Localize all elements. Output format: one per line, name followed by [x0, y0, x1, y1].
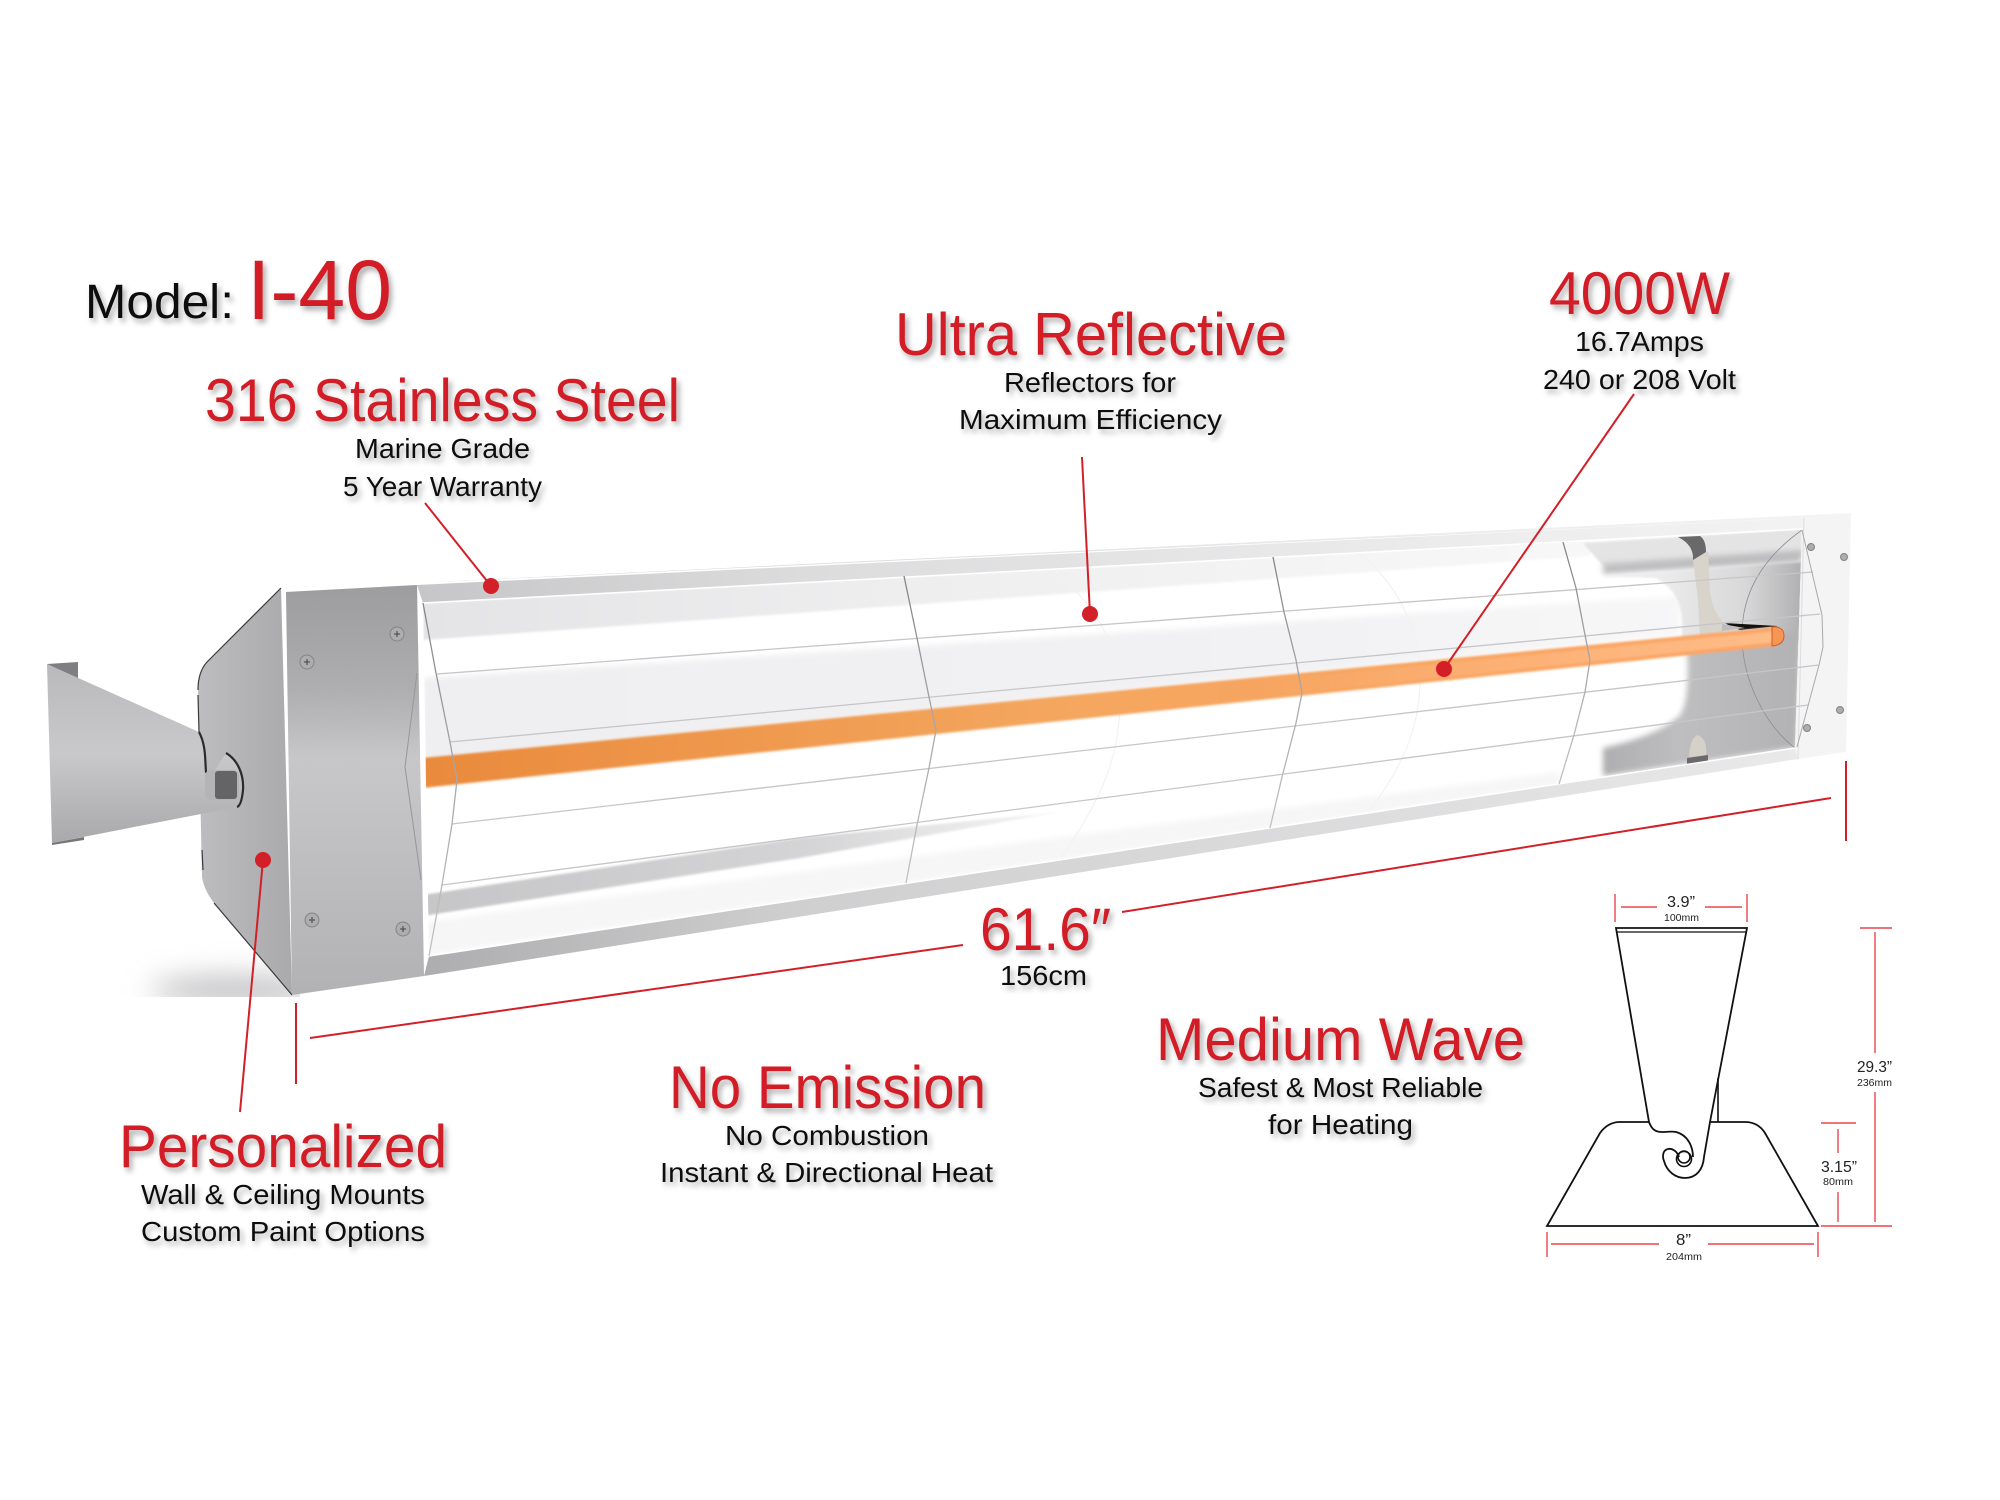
callout: no emission: No Emission — [669, 1054, 986, 1121]
callout: medium wave: Safest & Most Reliable — [1198, 1072, 1483, 1103]
reflector end section — [1583, 529, 1802, 776]
callout: personalized: Wall & Ceiling Mounts — [141, 1179, 425, 1210]
dimension labels: 100mm — [1664, 912, 1699, 924]
dimension labels — [1664, 894, 1892, 1263]
callout: 316 stainless steel — [205, 367, 680, 502]
dimension labels: 236mm — [1857, 1077, 1892, 1089]
ceramic insulators — [1678, 536, 1778, 765]
bolt — [205, 770, 239, 800]
callout: 4000W: 4000W — [1549, 260, 1730, 327]
callout: no emission — [660, 1054, 993, 1188]
callout: no emission: No Combustion — [725, 1120, 929, 1151]
frame strips — [417, 513, 1851, 976]
base outline — [1547, 1122, 1818, 1226]
callout: ultra reflective: Maximum Efficiency — [959, 404, 1222, 435]
callout: 4000W — [1543, 260, 1736, 395]
dimension labels: 29.3” — [1857, 1059, 1892, 1076]
callout: 4000W: 240 or 208 Volt — [1543, 364, 1736, 395]
callout: 316 stainless steel: 5 Year Warranty — [343, 471, 542, 502]
illustration: patio heater — [47, 513, 1851, 1004]
profile diagram — [1547, 894, 1892, 1263]
dimension labels: 3.9” — [1667, 894, 1695, 911]
model title — [85, 243, 392, 337]
dimension labels: 8” — [1676, 1232, 1691, 1249]
dimension lines — [1547, 894, 1892, 1257]
callout: personalized — [119, 1113, 447, 1247]
fin outline — [1616, 928, 1747, 1178]
heating element — [422, 627, 1784, 788]
callout: medium wave — [1156, 1006, 1525, 1140]
dimension labels: 204mm — [1666, 1251, 1702, 1263]
ribs — [405, 530, 1823, 956]
reflector opening — [422, 529, 1802, 956]
model title: I-40 — [247, 243, 392, 337]
model title: Model: — [85, 276, 234, 329]
callout: 316 stainless steel: Marine Grade — [355, 433, 530, 464]
rear brace — [1717, 1078, 1719, 1122]
length label: 156cm — [1000, 960, 1087, 991]
callout: ultra reflective — [895, 301, 1287, 435]
dimension labels: 80mm — [1823, 1176, 1853, 1188]
callout: 4000W: 16.7Amps — [1575, 326, 1704, 357]
dimension labels: 3.15” — [1821, 1159, 1857, 1176]
reflector bands — [423, 540, 1680, 956]
side panel edges — [198, 588, 292, 995]
length label: 61.6″ — [980, 896, 1111, 963]
callout lines and dots — [240, 394, 1634, 1112]
length dimension lines — [296, 761, 1846, 1084]
screws — [300, 544, 1848, 936]
callout: personalized: Personalized — [119, 1113, 447, 1180]
callout: 316 stainless steel: 316 Stainless Steel — [205, 367, 680, 434]
callout: ultra reflective: Reflectors for — [1004, 367, 1176, 398]
callout: medium wave: for Heating — [1268, 1109, 1413, 1140]
callout: medium wave: Medium Wave — [1156, 1006, 1525, 1073]
floor shadow — [150, 976, 320, 1004]
wall bracket — [47, 662, 243, 845]
side panel — [198, 588, 292, 995]
length label — [980, 896, 1111, 991]
pivot bolt — [1676, 1151, 1692, 1166]
callout: personalized: Custom Paint Options — [141, 1216, 425, 1247]
callout: no emission: Instant & Directional Heat — [660, 1157, 993, 1188]
front plate — [280, 580, 430, 995]
callout: ultra reflective: Ultra Reflective — [895, 301, 1287, 368]
wires — [437, 572, 1820, 885]
